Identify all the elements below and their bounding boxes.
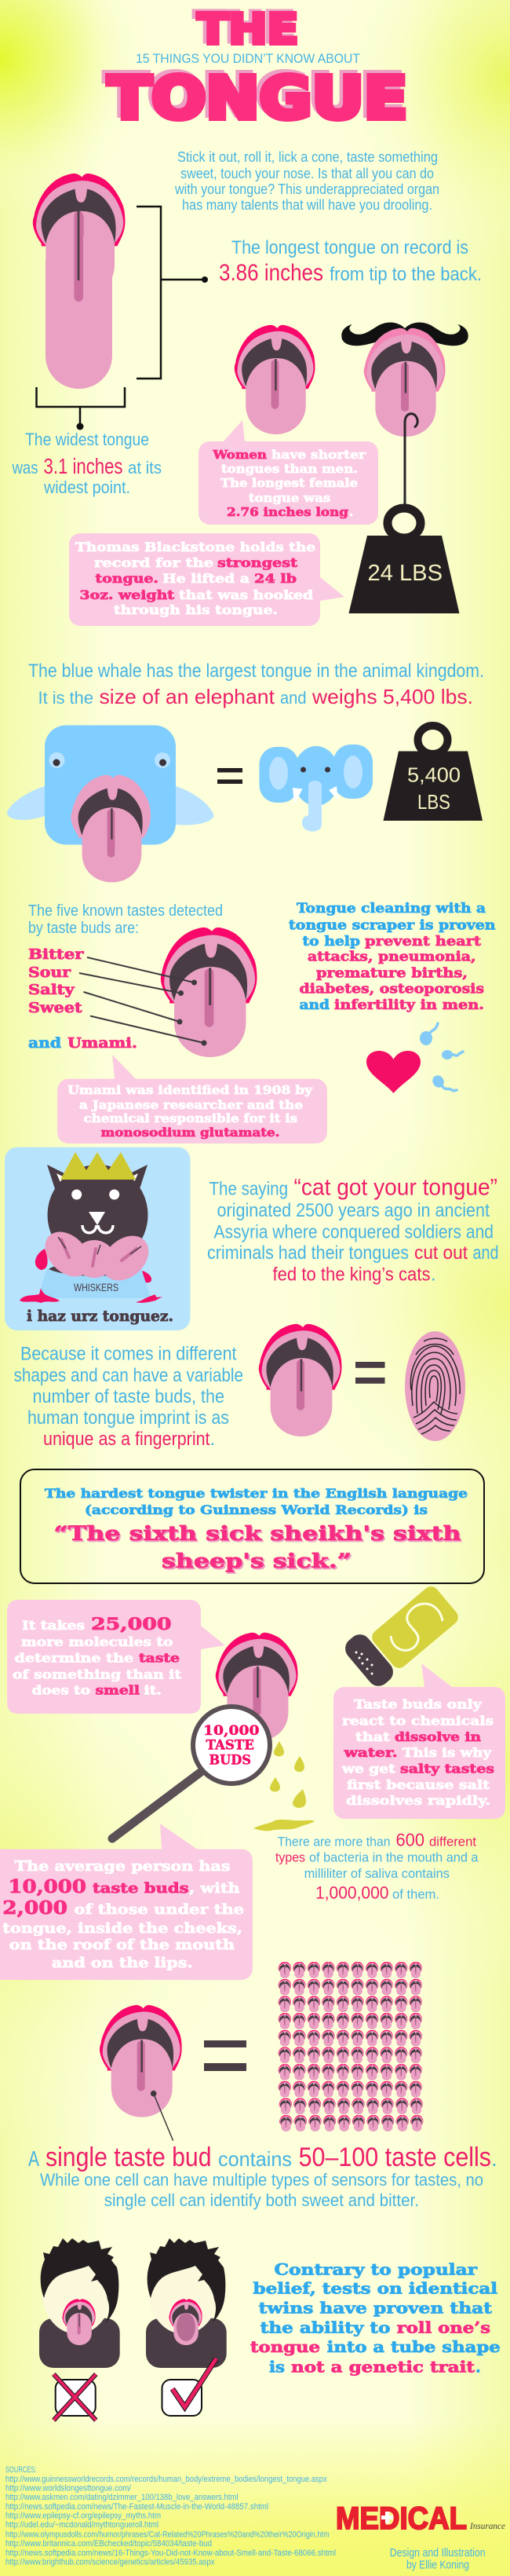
callout: umami: monosodium glutamate. bbox=[100, 1125, 279, 1140]
sources: http://udel.edu/~mcdonald/mythtongueroll.html bbox=[5, 2520, 158, 2530]
twin: rolled tongue bbox=[146, 2238, 227, 2368]
taste cells text: A bbox=[28, 2146, 39, 2171]
panel: cat with crown: i haz urz tonguez. bbox=[27, 1308, 173, 1325]
taste cells text: single cell can identify both sweet and bitter. bbox=[104, 2190, 419, 2210]
icon: salt shaker bbox=[341, 1583, 461, 1691]
rolled tongue text: not a genetic trait bbox=[291, 2358, 475, 2377]
sources: http://www.guinnessworldrecords.com/records/human_body/extreme_bodies/longest_tongue.aspx bbox=[5, 2475, 327, 2484]
tongue cleaning text: premature births, bbox=[316, 966, 468, 980]
weight: 5,400 lbs: LBS bbox=[417, 790, 450, 814]
fingerprint text: . bbox=[210, 1429, 215, 1450]
intro text bbox=[174, 149, 439, 213]
sources: SOURCES: bbox=[5, 2465, 36, 2475]
callout: taste buds and water: dissolve in bbox=[395, 1729, 481, 1744]
rolled tongue text: . bbox=[475, 2358, 481, 2377]
rolled tongue text: twins have proven that bbox=[259, 2300, 492, 2318]
icon: elephant bbox=[259, 745, 373, 832]
sources: http://www.olympusdolls.com/humor/phrases/Cat-Related%20Phrases%20and%20their%20Origin.htm bbox=[5, 2530, 330, 2540]
fingerprint text: Because it comes in different bbox=[20, 1344, 237, 1365]
blue whale text bbox=[28, 660, 484, 708]
panel: tongue twister: “The sixth sick sheikh's sixth bbox=[55, 1524, 462, 1546]
taste labels: Sweet bbox=[28, 1001, 82, 1016]
callout: strongest tongue: strongest bbox=[217, 555, 298, 570]
callout: 10,000 taste buds: , with bbox=[189, 1880, 240, 1897]
weight: 24 lbs: 24 LBS bbox=[367, 561, 443, 586]
icon: magnifying glass: TASTE bbox=[206, 1737, 254, 1753]
intro text: with your tongue? This underappreciated organ bbox=[174, 181, 439, 197]
panel: tongue twister: sheep's sick.” bbox=[162, 1550, 352, 1572]
fingerprint text bbox=[14, 1344, 243, 1450]
tongue cleaning text bbox=[289, 901, 496, 1012]
fingerprint text: shapes and can have a variable bbox=[14, 1365, 243, 1386]
tongue cleaning text: Tongue cleaning with a bbox=[297, 901, 486, 916]
tongue with taste map bbox=[161, 928, 257, 1057]
widest tongue text bbox=[12, 430, 162, 497]
icon: cat bbox=[20, 1152, 162, 1303]
taste cells text: single taste bud bbox=[46, 2142, 212, 2172]
long tongue illustration bbox=[33, 174, 126, 389]
callout: 25,000 molecules: smell bbox=[96, 1682, 140, 1698]
panel: tongue twister: (according to Guinness World Records) is bbox=[85, 1502, 428, 1517]
fingerprint text: number of taste buds, the bbox=[33, 1386, 224, 1407]
five tastes intro: The five known tastes detected bbox=[28, 902, 223, 920]
callout: taste buds and water bbox=[333, 1663, 505, 1819]
longest tongue text: 3.86 inches bbox=[219, 260, 323, 286]
blue whale text: and bbox=[280, 688, 306, 708]
tongue under magnifier bbox=[216, 1633, 298, 1741]
callout: taste buds and water: salty tastes bbox=[400, 1762, 494, 1776]
callout: 10,000 taste buds bbox=[0, 1824, 253, 1980]
tongue: fingerprint comparison bbox=[259, 1324, 342, 1436]
icon: fingerprint bbox=[405, 1331, 465, 1441]
callout: women: The longest female bbox=[220, 476, 358, 490]
subtitle: 15 THINGS YOU DIDN’T KNOW ABOUT bbox=[136, 51, 360, 66]
callout: women: tongues than men. bbox=[221, 462, 358, 476]
widest tongue text: 3.1 inches bbox=[44, 454, 122, 478]
equals sign: fingerprint bbox=[355, 1362, 384, 1384]
callout: strongest tongue: record for the bbox=[94, 555, 213, 570]
checkbox: ticked bbox=[162, 2358, 217, 2416]
title: The: THE bbox=[194, 2, 295, 52]
callout: 10,000 taste buds: and on the lips. bbox=[52, 1955, 193, 1971]
callout: umami: chemical responsible for it is bbox=[83, 1111, 297, 1125]
cat got your tongue text: . bbox=[431, 1264, 436, 1286]
sources: http://news.softpedia.com/news/The-Fastest-Muscle-in-the-World-48857.shtml bbox=[5, 2502, 268, 2512]
callout: 10,000 taste buds: on the roof of the mouth bbox=[9, 1937, 235, 1953]
rolled tongue text: the ability to bbox=[260, 2319, 391, 2337]
callout: taste buds and water: water. bbox=[343, 1745, 398, 1760]
bacteria text: There are more than bbox=[278, 1835, 391, 1850]
cat got your tongue text: “cat got your tongue” bbox=[293, 1175, 497, 1201]
cat got your tongue text: The saying bbox=[209, 1179, 288, 1200]
weight: 5,400 lbs: 5,400 bbox=[407, 763, 461, 787]
rolled tongue text: into a tube shape bbox=[327, 2338, 501, 2356]
bacteria text: milliliter of saliva contains bbox=[304, 1866, 450, 1881]
tongue cleaning text: attacks, pneumonia, bbox=[308, 949, 475, 964]
rolled tongue text: tongue bbox=[250, 2338, 320, 2356]
callout: strongest tongue: 24 lb bbox=[254, 571, 297, 586]
bacteria text: of bacteria in the mouth and a bbox=[309, 1850, 479, 1865]
sources bbox=[5, 2465, 336, 2567]
intro text: Stick it out, roll it, lick a cone, taste something bbox=[177, 149, 438, 165]
sources: http://www.epilepsy-cf.org/epilepsy_myths.htm bbox=[5, 2512, 161, 2521]
widest tongue text: The widest tongue bbox=[25, 430, 149, 449]
callout: 10,000 taste buds: tongue, inside the cheeks, bbox=[2, 1920, 242, 1937]
tongue cleaning text: and bbox=[300, 997, 330, 1012]
callout: 25,000 molecules: it. bbox=[144, 1682, 162, 1698]
callout: 25,000 molecules: It takes bbox=[22, 1618, 85, 1633]
weight: 24 lbs bbox=[348, 508, 460, 613]
panel: tongue twister: “The sixth sick sheikh's sixth bbox=[53, 1522, 461, 1545]
widest tongue text: at its bbox=[128, 458, 162, 478]
fingerprint text: human tongue imprint is as bbox=[27, 1407, 229, 1429]
male tongue with hook bbox=[364, 328, 446, 504]
callout: strongest tongue bbox=[69, 533, 344, 626]
bacteria text bbox=[275, 1830, 479, 1903]
credit bbox=[390, 2546, 486, 2572]
widest tongue text: widest point. bbox=[43, 478, 130, 497]
intro text: has many talents that will have you drooling. bbox=[182, 197, 432, 213]
callout: taste buds and water: react to chemicals bbox=[342, 1714, 494, 1728]
taste leader lines bbox=[79, 957, 207, 1046]
callout: strongest tongue: 3oz. weight bbox=[80, 587, 175, 602]
title: Tongue: TONGUE bbox=[104, 61, 404, 129]
equals sign: taste cells bbox=[204, 2040, 246, 2071]
logo: Medical Insurance: MEDICAL bbox=[336, 2501, 467, 2536]
five tastes intro bbox=[28, 902, 223, 937]
taste labels: Sour bbox=[28, 965, 71, 981]
callout: taste buds and water: we get bbox=[341, 1762, 396, 1776]
female tongue bbox=[235, 325, 315, 434]
icon: heart bbox=[366, 1051, 421, 1093]
taste cells text bbox=[28, 2142, 497, 2210]
callout: 10,000 taste buds: 2,000 bbox=[2, 1897, 67, 1919]
blue whale text: size of an elephant bbox=[99, 685, 275, 708]
callout: 25,000 molecules: determine the bbox=[14, 1651, 133, 1665]
taste labels: and bbox=[28, 1036, 61, 1052]
tongue cleaning text: tongue scraper is proven bbox=[289, 917, 496, 933]
taste labels bbox=[28, 947, 137, 1052]
callout: 10,000 taste buds: of those under the bbox=[74, 1901, 244, 1918]
callout: umami: Umami was identified in 1908 by bbox=[67, 1083, 313, 1097]
bacteria text: 600 bbox=[395, 1830, 424, 1850]
taste cells text: contains bbox=[218, 2147, 292, 2171]
callout: 10,000 taste buds: The average person has bbox=[15, 1858, 230, 1875]
checkbox: crossed bbox=[53, 2374, 96, 2420]
saliva drops and puddle bbox=[253, 1741, 315, 1831]
callout: women: . bbox=[349, 505, 353, 519]
callout: women: have shorter bbox=[271, 448, 366, 462]
title: Tongue: TONGUE bbox=[108, 64, 408, 132]
tongue cleaning text: diabetes, osteoporosis bbox=[300, 982, 484, 996]
callout: strongest tongue: through his tongue. bbox=[114, 602, 278, 617]
mustache bbox=[341, 323, 468, 346]
taste labels: Umami. bbox=[67, 1036, 137, 1052]
sources: http://news.softpedia.com/news/16-Things-You-Did-not-Know-about-Smell-and-Taste-68066.shtml bbox=[5, 2549, 336, 2558]
icon: cat: WHISKERS bbox=[74, 1281, 118, 1293]
grid of tongues: taste cells bbox=[279, 1962, 423, 2131]
rolled tongue text: is bbox=[269, 2358, 285, 2377]
fingerprint text: unique as a fingerprint bbox=[43, 1429, 210, 1450]
rolled tongue text: roll one’s bbox=[397, 2319, 490, 2337]
rolled tongue text bbox=[250, 2261, 501, 2377]
rolled tongue text: Contrary to popular bbox=[275, 2261, 478, 2279]
callout: women: 2.76 inches long bbox=[227, 505, 349, 519]
callout: women: tongue was bbox=[249, 491, 330, 505]
icon: sperm bbox=[420, 1023, 463, 1091]
icon: whale bbox=[7, 726, 214, 883]
callout: 25,000 molecules: of something than it bbox=[13, 1667, 182, 1682]
callout: strongest tongue: that was hooked bbox=[179, 587, 313, 602]
cat got your tongue text: and bbox=[472, 1242, 499, 1264]
sources: http://www.askmen.com/dating/dzimmer_100/138b_love_answers.html bbox=[5, 2493, 239, 2502]
panel: tongue twister: sheep's sick.” bbox=[163, 1551, 353, 1574]
tongue: single taste bud bbox=[100, 2005, 182, 2117]
callout: taste buds and water: dissolves rapidly. bbox=[346, 1793, 490, 1808]
cat got your tongue text: cut out bbox=[414, 1242, 468, 1264]
bracket: tongue length bbox=[137, 207, 208, 379]
taste cells text: While one cell can have multiple types of sensors for tastes, no bbox=[40, 2170, 483, 2190]
taste bud pointer bbox=[151, 2091, 173, 2141]
cat got your tongue text bbox=[207, 1175, 499, 1286]
callout: umami: a Japanese researcher and the bbox=[79, 1098, 303, 1112]
taste cells text: 50–100 taste cells bbox=[299, 2142, 491, 2172]
bacteria text: types bbox=[275, 1850, 305, 1865]
callout: strongest tongue: tongue. bbox=[96, 571, 158, 586]
longest tongue text: from tip to the back. bbox=[330, 264, 482, 285]
tongue cleaning text: infertility in men. bbox=[334, 997, 484, 1012]
callout: umami bbox=[57, 1055, 327, 1143]
callout: strongest tongue: He lifted a bbox=[162, 571, 250, 586]
callout: 25,000 molecules: taste bbox=[139, 1651, 180, 1665]
title: The: THE bbox=[198, 5, 298, 53]
credit: by Ellie Koning bbox=[406, 2559, 469, 2572]
widest tongue text: was bbox=[12, 458, 38, 478]
callout: taste buds and water: first because salt bbox=[347, 1777, 490, 1792]
cat got your tongue text: criminals had their tongues bbox=[207, 1242, 409, 1264]
panel: tongue twister: The hardest tongue twister in the English language bbox=[45, 1486, 468, 1501]
sources: http://www.worldslongesttongue.com/ bbox=[5, 2484, 132, 2494]
five tastes intro: by taste buds are: bbox=[28, 920, 139, 937]
intro text: sweet, touch your nose. Is that all you can do bbox=[180, 166, 434, 181]
icon: magnifying glass: 10,000 bbox=[203, 1723, 260, 1739]
callout: 25,000 molecules: does to bbox=[31, 1682, 90, 1698]
longest tongue text: The longest tongue on record is bbox=[231, 237, 468, 258]
callout: women: Women bbox=[212, 448, 267, 462]
bacteria text: different bbox=[429, 1835, 476, 1850]
taste labels: Bitter bbox=[28, 947, 84, 963]
blue whale text: It is the bbox=[38, 688, 93, 708]
cat got your tongue text: fed to the king’s cats bbox=[273, 1264, 430, 1286]
credit: Design and Illustration bbox=[390, 2546, 486, 2560]
longest tongue text bbox=[219, 237, 482, 286]
callout: 10,000 taste buds: 10,000 bbox=[8, 1876, 86, 1897]
sources: http://www.brighthub.com/science/genetics/articles/45935.aspx bbox=[5, 2558, 215, 2567]
twin: flat tongue bbox=[39, 2238, 120, 2368]
tongue cleaning text: prevent heart bbox=[365, 934, 481, 949]
icon: magnifying glass bbox=[112, 1707, 270, 1839]
callout: 25,000 molecules: 25,000 bbox=[91, 1614, 171, 1634]
equals sign: whale bbox=[217, 768, 242, 784]
rolled tongue text: belief, tests on identical bbox=[253, 2280, 497, 2298]
callout: taste buds and water: that bbox=[355, 1729, 391, 1744]
weight: 5,400 lbs bbox=[383, 726, 483, 821]
bacteria text: 1,000,000 bbox=[315, 1883, 389, 1903]
callout: taste buds and water: Taste buds only bbox=[354, 1696, 483, 1711]
panel: cat with crown bbox=[5, 1147, 190, 1330]
tongue cleaning text: to help bbox=[303, 934, 360, 949]
bracket: tongue width bbox=[36, 387, 125, 430]
panel: tongue twister bbox=[20, 1469, 484, 1583]
blue whale text: weighs 5,400 lbs. bbox=[311, 685, 473, 708]
callout: 10,000 taste buds: taste buds bbox=[93, 1880, 188, 1897]
logo: Medical Insurance: Insurance bbox=[469, 2520, 506, 2531]
callout: strongest tongue: Thomas Blackstone holds the bbox=[75, 540, 315, 554]
callout: women bbox=[199, 420, 378, 525]
bacteria text: of them. bbox=[392, 1887, 439, 1902]
taste labels: Salty bbox=[28, 982, 75, 998]
taste cells text: . bbox=[491, 2146, 497, 2171]
callout: 25,000 molecules bbox=[7, 1600, 225, 1714]
callout: 25,000 molecules: more molecules to bbox=[21, 1634, 173, 1649]
icon: magnifying glass: BUDS bbox=[209, 1753, 251, 1769]
sources: http://www.britannica.com/EBchecked/topic/584034/taste-bud bbox=[5, 2539, 212, 2549]
callout: taste buds and water: This is why bbox=[403, 1745, 492, 1760]
